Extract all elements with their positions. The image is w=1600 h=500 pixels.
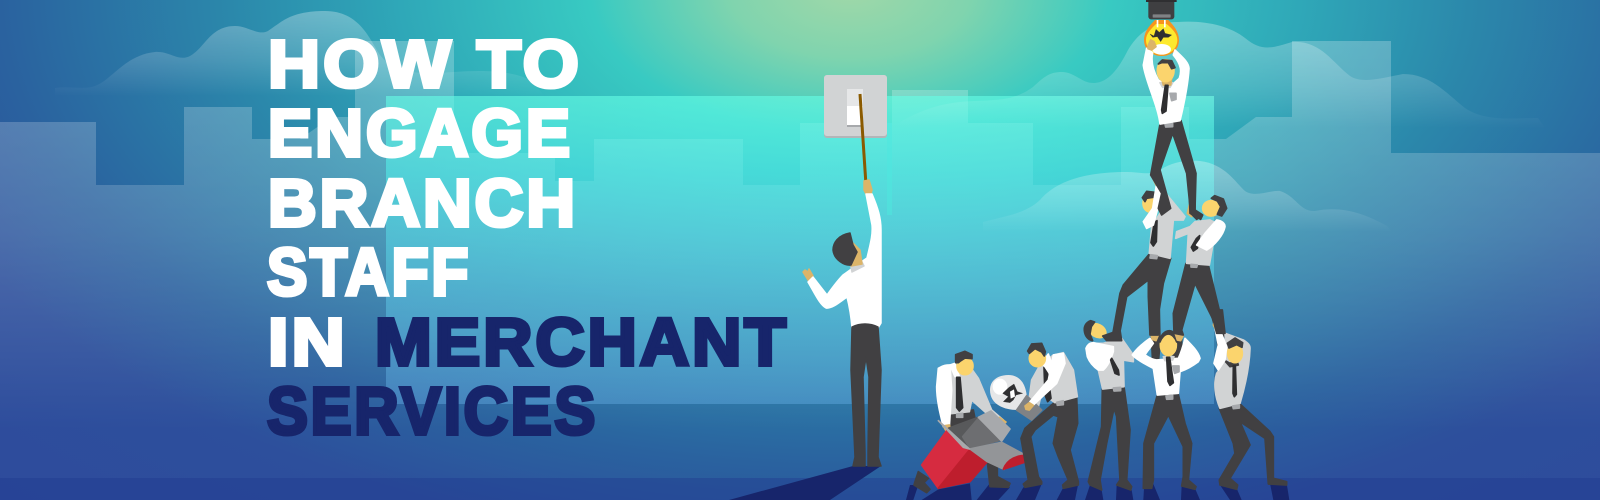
title line: how to: HOW TO <box>268 27 582 102</box>
figure: man holding box <box>914 351 1010 493</box>
icon: lamp socket <box>1146 0 1177 19</box>
title line: merchant: MERCHANT <box>375 305 789 380</box>
central bright wall panel <box>386 96 1214 404</box>
title line: in: IN <box>268 305 348 380</box>
floor band <box>0 478 1600 500</box>
shadow: tall man <box>729 466 881 500</box>
pole <box>860 94 866 185</box>
icon: open red box <box>922 411 1033 488</box>
title line: staff: STAFF <box>267 235 471 310</box>
skyline silhouette <box>0 41 1600 430</box>
figure: tall man with pole <box>729 94 881 500</box>
cloud: centre right <box>900 22 1545 128</box>
title <box>267 27 789 449</box>
figure: man leaning, right base <box>1210 310 1287 489</box>
title line: engage: ENGAGE <box>268 96 573 171</box>
cloud: left <box>55 11 545 96</box>
title line: branch: BRANCH <box>268 166 578 241</box>
figure: right middle man <box>1173 170 1227 335</box>
cloud: lower right <box>983 161 1392 232</box>
figure: left middle man <box>1103 176 1185 341</box>
icon: lit bulb <box>1144 20 1179 56</box>
icon: light switch <box>824 75 887 138</box>
figure: man looking up, left base <box>1084 321 1133 490</box>
bright strip <box>887 123 892 215</box>
figure shadows: lower group <box>906 483 1289 500</box>
figure: man with light bulb <box>990 343 1078 488</box>
title line: services: SERVICES <box>267 374 598 449</box>
figure: top man reaching bulb <box>1143 0 1201 219</box>
icon: grey bulb <box>990 375 1042 420</box>
figure: man holding pyramid, centre base <box>1132 310 1200 489</box>
